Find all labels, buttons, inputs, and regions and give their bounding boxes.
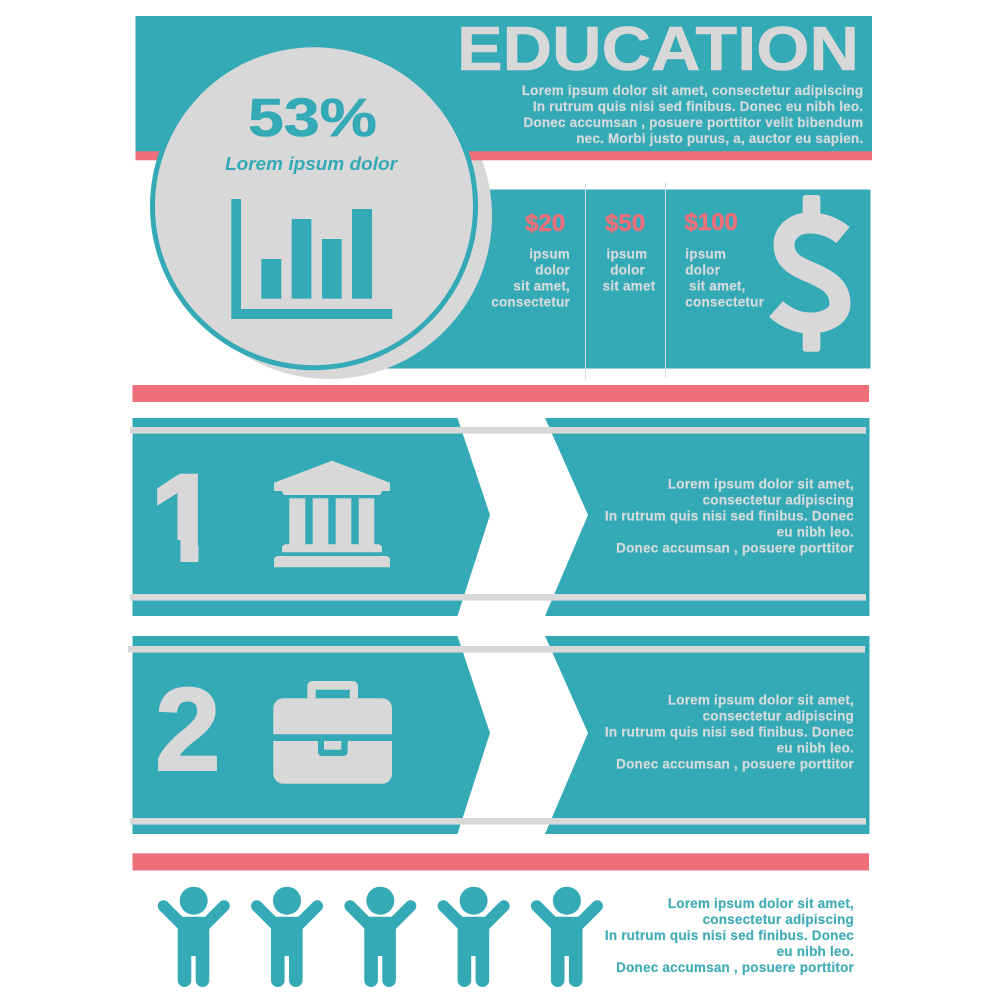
panel: step 2 <box>128 636 870 834</box>
big percentage: 53% <box>248 88 377 148</box>
price column: $20: $20 <box>525 210 565 237</box>
price column: $100: consectetur <box>685 294 765 309</box>
price column: $100: $100 <box>684 209 738 236</box>
price column: $20: ipsum <box>529 246 570 261</box>
price column: $20: sit amet, <box>513 278 570 293</box>
step 1 text: Lorem ipsum dolor sit amet, <box>668 476 854 491</box>
icon: person 4 <box>443 887 504 987</box>
circle badge <box>152 45 476 368</box>
step 2 text: In rutrum quis nisi sed finibus. Donec <box>605 724 854 740</box>
icon: person 5 <box>537 887 597 987</box>
column divider lines <box>586 182 666 380</box>
circle caption: Lorem ipsum dolor <box>225 154 398 174</box>
step 2 text <box>605 692 855 772</box>
circle shadow <box>166 53 492 379</box>
price column: $50: dolor <box>610 262 646 277</box>
header text block: In rutrum quis nisi sed finibus. Donec eu nibh leo. <box>533 99 863 114</box>
step 2 left arrow <box>132 636 490 834</box>
step 1 text: consectetur adipiscing <box>703 492 854 507</box>
price column: $50 <box>603 210 656 293</box>
step 2 rails <box>128 646 866 825</box>
step 1 text: eu nibh leo. <box>777 524 854 539</box>
footer text: Lorem ipsum dolor sit amet, <box>668 896 854 911</box>
price column: $20: consectetur <box>491 294 571 309</box>
icon: person 1 <box>164 887 224 987</box>
step 2 text: Lorem ipsum dolor sit amet, <box>668 692 854 708</box>
panel: step 1 <box>130 418 870 616</box>
step 2 text: eu nibh leo. <box>777 740 854 756</box>
price column: $50: $50 <box>605 210 645 237</box>
icon: dollar sign <box>776 195 843 352</box>
header text block: nec. Morbi justo purus, a, auctor eu sapien. <box>576 131 863 146</box>
step 1 right arrow <box>545 418 870 616</box>
icon: museum building <box>274 461 390 567</box>
header text block: Donec accumsan , posuere porttitor velit bibendum <box>523 115 863 130</box>
price column: $100: sit amet, <box>689 278 746 293</box>
divider bar bottom <box>132 853 869 870</box>
footer text: Donec accumsan , posuere porttitor <box>616 960 855 975</box>
icon: person 3 <box>350 887 411 987</box>
title: EDUCATION <box>457 15 859 84</box>
people icons row <box>164 887 597 987</box>
step 1 left arrow <box>132 418 490 616</box>
panel: pricing band <box>380 190 870 368</box>
price column: $20 <box>491 210 571 309</box>
price column: $50: ipsum <box>607 246 647 261</box>
step 1 number: 1 <box>150 450 219 588</box>
step 1 text: Donec accumsan , posuere porttitor <box>616 540 855 555</box>
price column: $20: dolor <box>535 262 571 277</box>
step 2 number: 2 <box>155 664 221 796</box>
step 1 text: In rutrum quis nisi sed finibus. Donec <box>605 508 854 523</box>
header band <box>136 16 872 160</box>
icon: bar chart <box>231 199 392 319</box>
step 2 text: consectetur adipiscing <box>703 708 854 724</box>
header text block: Lorem ipsum dolor sit amet, consectetur adipiscing <box>522 83 863 98</box>
price column: $100 <box>684 209 765 309</box>
footer text: eu nibh leo. <box>777 944 854 959</box>
step 2 text: Donec accumsan , posuere porttitor <box>616 756 855 772</box>
step 1 rails <box>130 427 866 601</box>
footer text: consectetur adipiscing <box>703 912 854 927</box>
step 2 right arrow <box>545 636 870 834</box>
price column: $100: dolor <box>685 262 721 277</box>
footer text <box>605 896 855 975</box>
step 1 text <box>605 476 855 555</box>
icon: person 2 <box>257 887 317 987</box>
header text block <box>522 83 863 146</box>
footer text: In rutrum quis nisi sed finibus. Donec <box>605 928 854 943</box>
price column: $50: sit amet <box>603 278 656 293</box>
divider bar top <box>132 385 869 402</box>
price column: $100: ipsum <box>685 246 726 261</box>
icon: briefcase <box>273 681 392 784</box>
